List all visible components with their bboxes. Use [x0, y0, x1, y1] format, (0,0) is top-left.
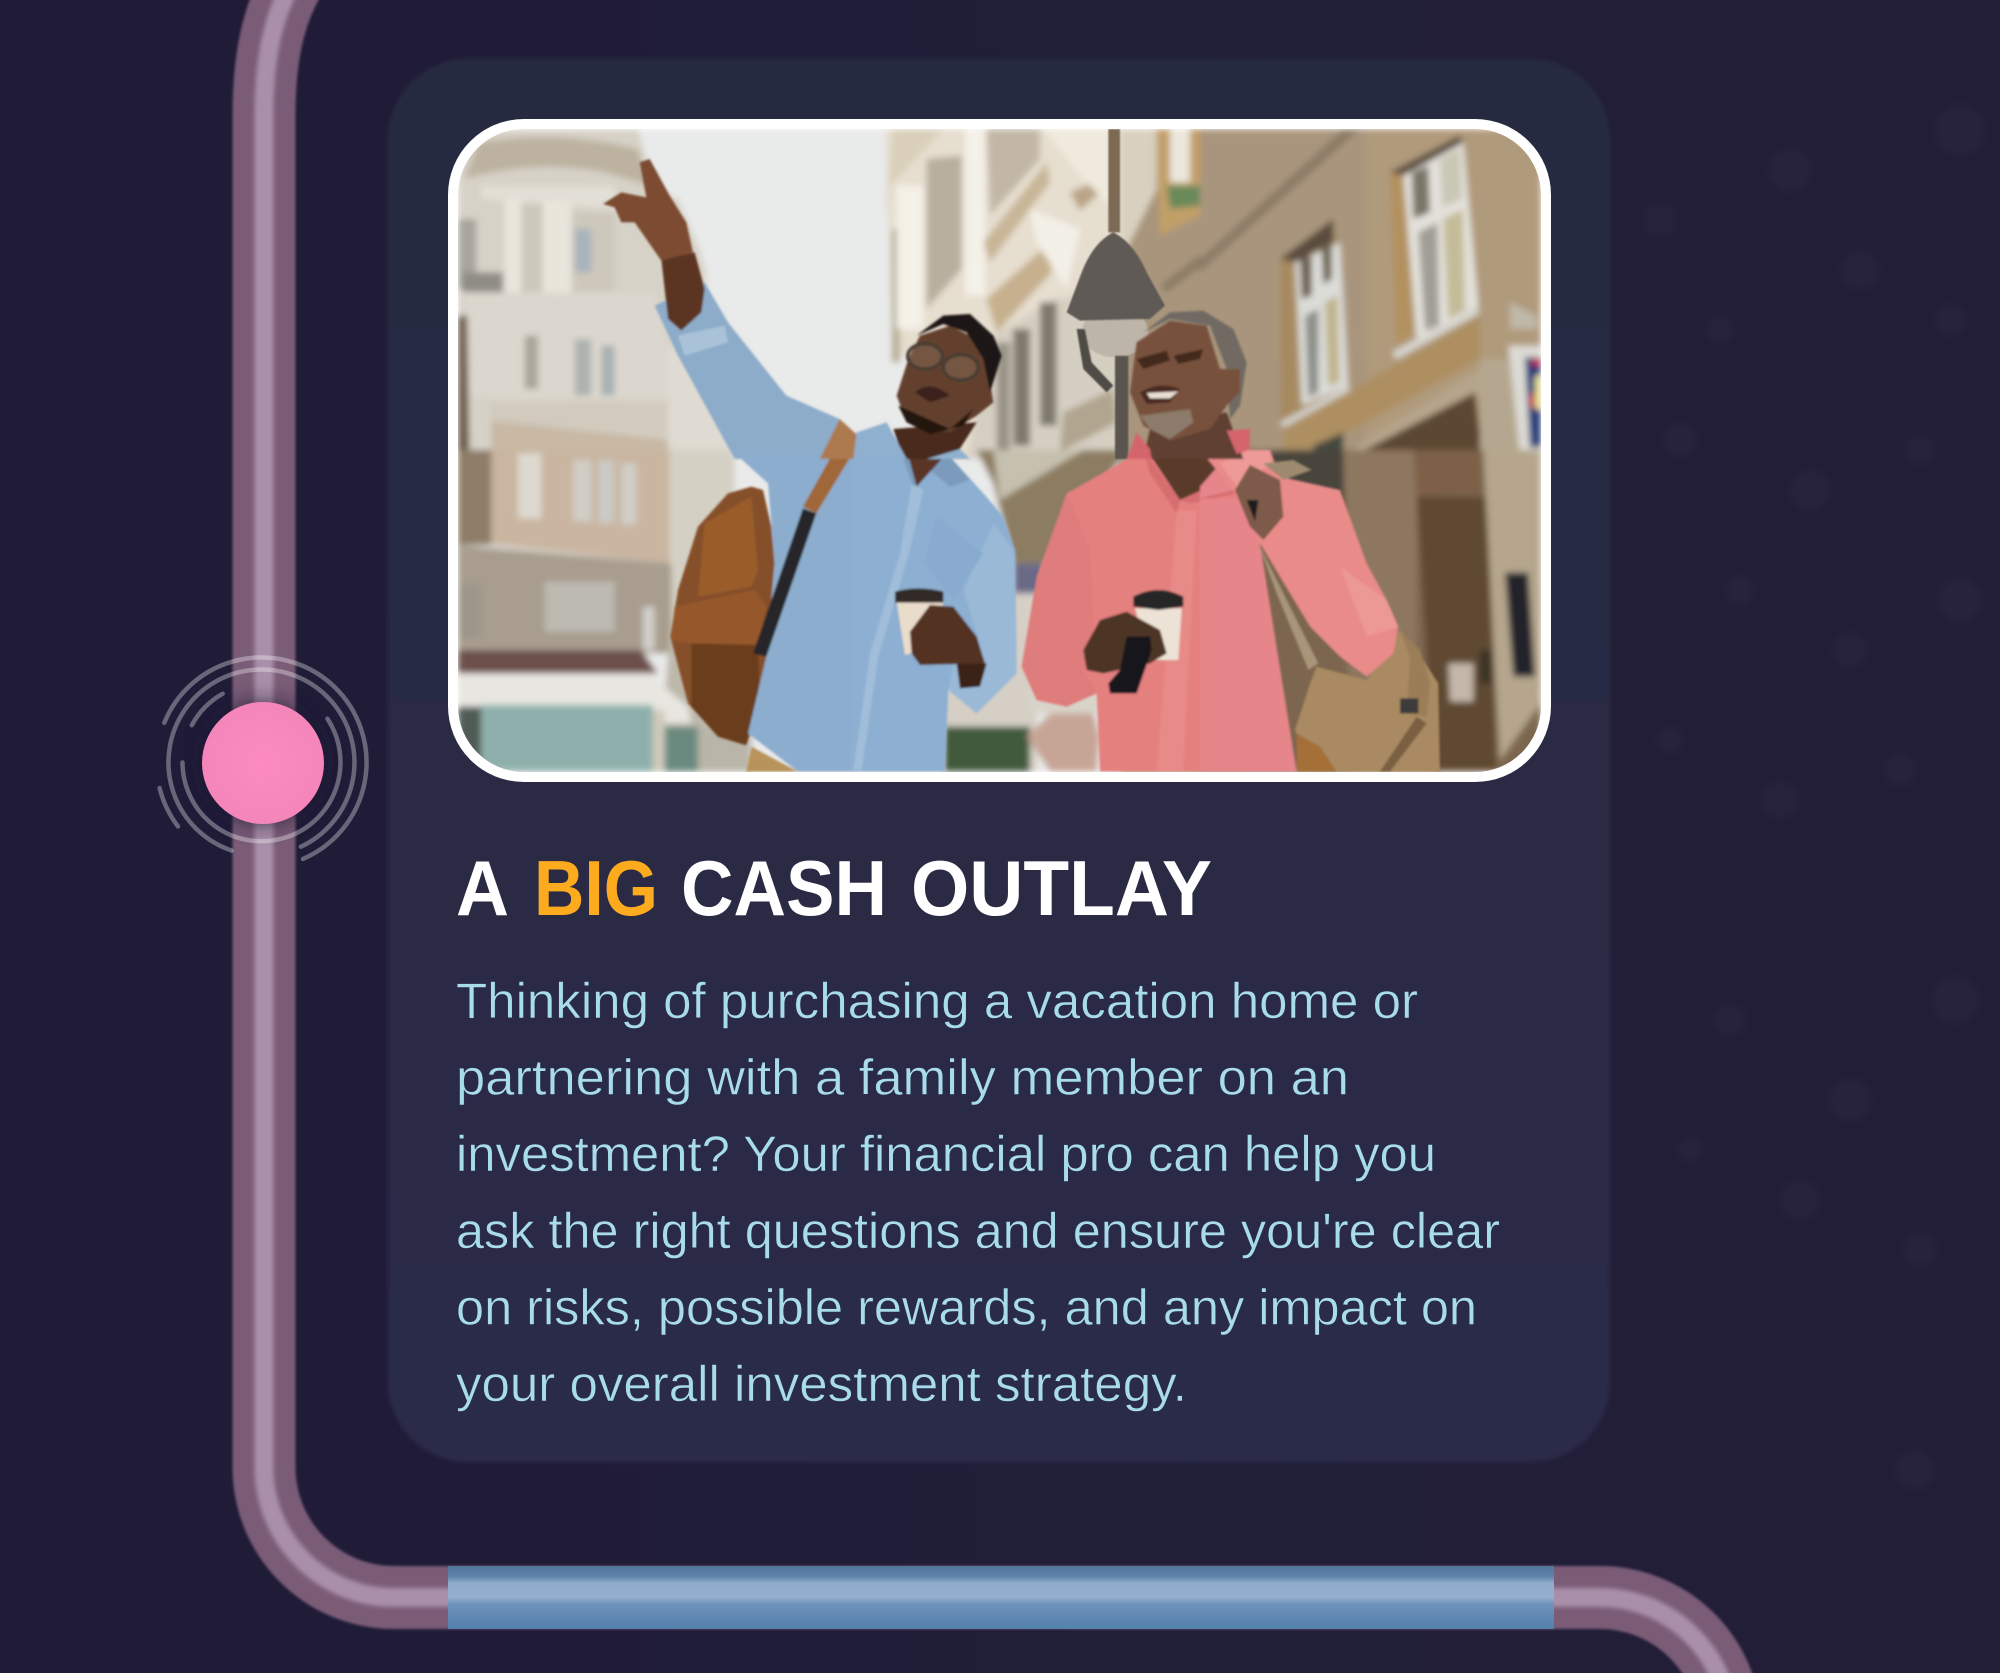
pipe: blue highlighted segment: [448, 1566, 1554, 1629]
backpack straps: [753, 450, 855, 657]
body text: Thinking of purchasing a vacation home or: [456, 973, 1418, 1029]
cup, hand, sunglasses: [1135, 608, 1182, 660]
pipe: winding connector line: [264, 0, 1730, 1673]
body text: your overall investment strategy.: [456, 1356, 1187, 1412]
marker: timeline node with rings: [160, 657, 367, 859]
lamp post: [1067, 129, 1165, 459]
cup and hand: [897, 602, 943, 655]
photo: two men walking in a city street: [448, 119, 1551, 782]
panel: card background: [388, 59, 1610, 1462]
man in pink shirt: [1022, 311, 1440, 772]
infographic canvas: [157, 0, 1754, 1673]
body text: on risks, possible rewards, and any impact on: [456, 1279, 1477, 1335]
body text: ask the right questions and ensure you're clear: [456, 1203, 1500, 1259]
people: [603, 159, 1440, 772]
satchel: [1295, 630, 1440, 772]
heading: A: [456, 844, 509, 932]
torso: [1022, 450, 1250, 772]
head: [1127, 311, 1250, 459]
heading: BIG: [534, 844, 658, 932]
backpack: [670, 487, 775, 745]
photo background: street buildings: [458, 129, 1541, 772]
body text: [456, 973, 1500, 1412]
torso and sleeves: [655, 282, 858, 459]
body text: partnering with a family member on an: [456, 1050, 1349, 1106]
head with glasses: [853, 314, 1002, 459]
heading: OUTLAY: [911, 844, 1212, 932]
raised forearm and hand: [603, 159, 705, 331]
heading: CASH: [681, 844, 887, 932]
body text: investment? Your financial pro can help you: [456, 1126, 1436, 1182]
man in blue shirt: [603, 159, 1017, 772]
heading: [456, 844, 1212, 932]
